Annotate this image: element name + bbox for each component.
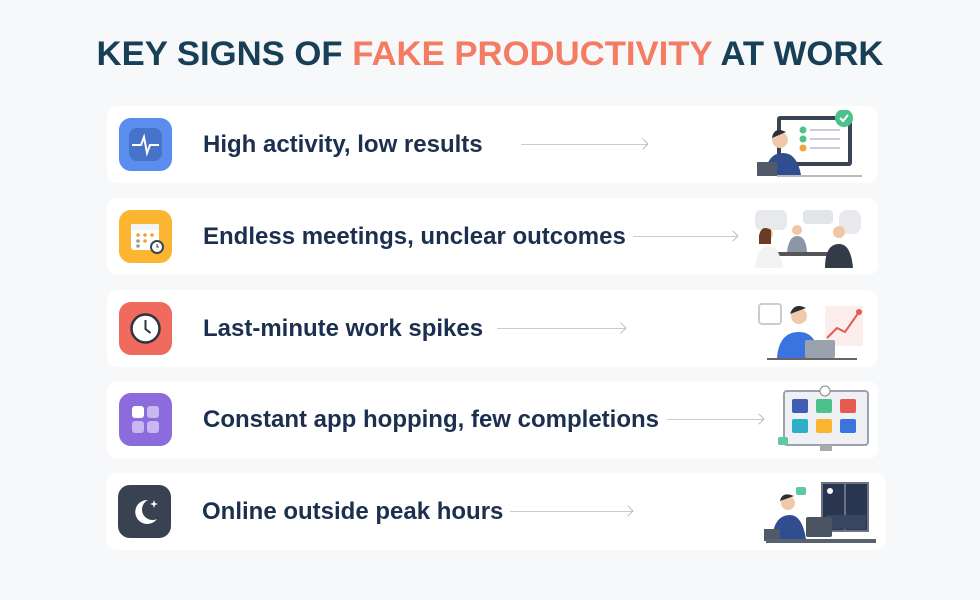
label: Online outside peak hours: [202, 498, 503, 525]
panel: meetings: [107, 198, 878, 275]
panel: high activity: [107, 106, 878, 183]
arrow: [521, 144, 647, 145]
icon: apps: [119, 393, 172, 446]
panel: online outside peak hours: [106, 473, 886, 550]
illustration: person with chart: [758, 303, 863, 360]
illustration: person at monitor: [757, 110, 862, 177]
icon: moon: [118, 485, 171, 538]
label: Constant app hopping, few completions: [203, 406, 659, 433]
panel: app hopping: [107, 381, 878, 459]
illustration: night work: [764, 482, 876, 543]
icon: pulse: [119, 118, 172, 171]
label: Endless meetings, unclear outcomes: [203, 223, 626, 250]
arrow: [667, 419, 763, 420]
illustration: app monitor: [778, 386, 869, 451]
panel: last-minute: [107, 290, 878, 367]
icon: clock: [119, 302, 172, 355]
arrow: [633, 236, 737, 237]
title: KEY SIGNS OF FAKE PRODUCTIVITY AT WORK: [97, 35, 883, 73]
illustration: meeting: [755, 210, 861, 268]
arrow: [497, 328, 625, 329]
icon: calendar: [119, 210, 172, 263]
arrow: [510, 511, 632, 512]
label: Last-minute work spikes: [203, 315, 483, 342]
label: High activity, low results: [203, 131, 483, 158]
